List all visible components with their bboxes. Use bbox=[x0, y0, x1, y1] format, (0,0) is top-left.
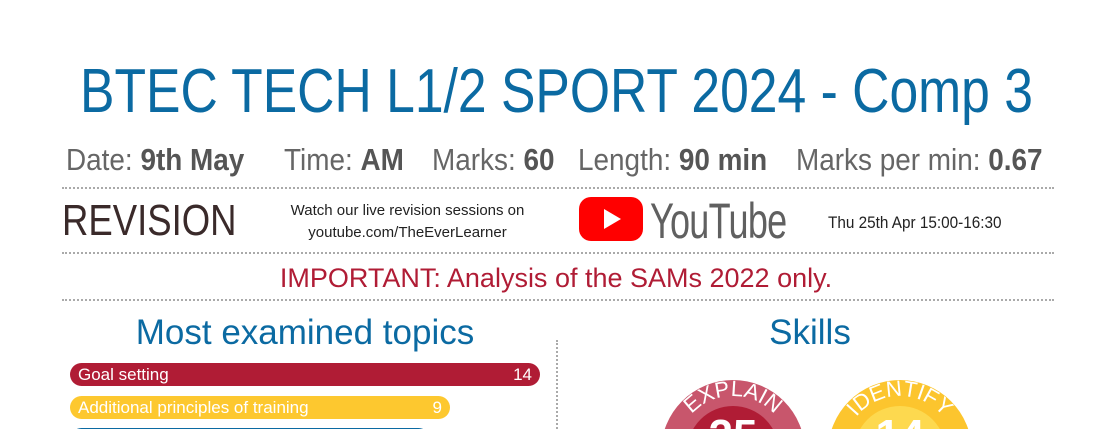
icon: youtube logo bbox=[579, 193, 786, 249]
info row: Marks per min: 0.67 bbox=[796, 142, 1043, 177]
bar: goal setting bbox=[70, 363, 540, 386]
info row: Marks: 60 bbox=[432, 142, 554, 177]
skill: identify: IDENTIFY bbox=[846, 380, 954, 416]
heading: most examined topics: Most examined topics bbox=[136, 313, 474, 352]
info row: Time: AM bbox=[284, 142, 404, 177]
bar: additional principles: 9 bbox=[433, 398, 442, 417]
skill: explain: EXPLAIN bbox=[682, 380, 783, 413]
skill: identify bbox=[832, 380, 968, 429]
bar: third bbox=[70, 428, 430, 429]
revision text: youtube.com/TheEverLearner bbox=[308, 224, 507, 241]
revision text: Watch our live revision sessions on bbox=[291, 202, 524, 219]
heading: skills: Skills bbox=[769, 313, 851, 352]
title: BTEC TECH L1/2 SPORT 2024 - Comp 3 bbox=[80, 57, 1033, 126]
icon: youtube logo: YouTube bbox=[650, 193, 786, 249]
bar: additional principles: Additional principles of training bbox=[78, 398, 309, 417]
bar chart bbox=[70, 363, 540, 429]
revision text bbox=[290, 202, 524, 241]
info row bbox=[66, 142, 1043, 177]
skills circles bbox=[664, 380, 968, 429]
skill: explain bbox=[664, 380, 802, 429]
important note: IMPORTANT: Analysis of the SAMs 2022 only. bbox=[280, 263, 832, 293]
info row: Length: 90 min bbox=[578, 142, 767, 177]
bar: goal setting: Goal setting bbox=[78, 365, 169, 384]
session time: Thu 25th Apr 15:00-16:30 bbox=[828, 213, 1002, 232]
revision heading: REVISION bbox=[62, 196, 237, 245]
info row: Date: 9th May bbox=[66, 142, 244, 177]
bar: goal setting: 14 bbox=[513, 365, 532, 384]
bar: additional principles bbox=[70, 396, 450, 419]
